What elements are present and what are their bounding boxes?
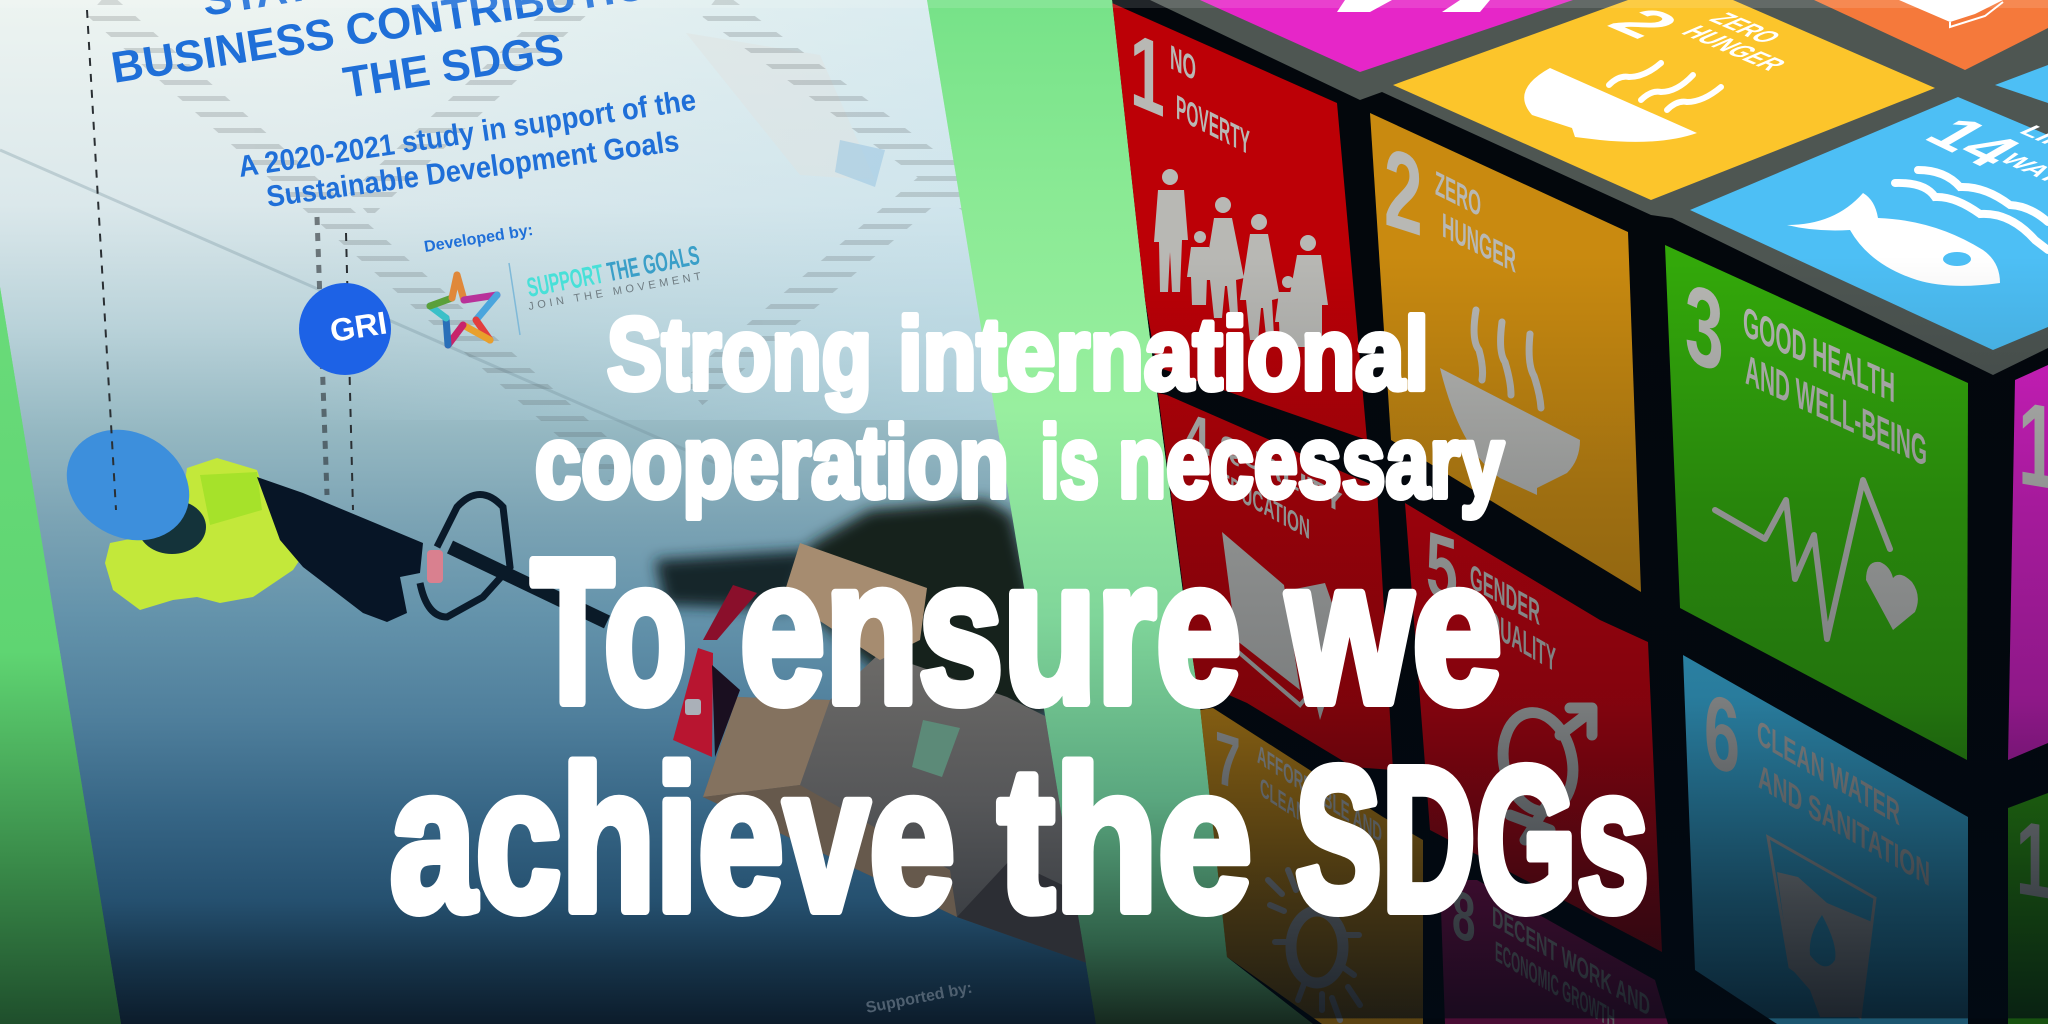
heading: strong international cooperation: cooperation [535,405,1009,519]
illustration: red bag [673,585,757,757]
tile: 1 no poverty: NO [1170,37,1196,89]
tile: 3 good health [1665,245,1968,760]
illustration: pallet jack [420,494,607,622]
tile: 4 quality education: QUALITY [1220,427,1343,520]
tile: 4 quality education: 4 [1184,400,1210,480]
tile: 2 zero hunger side [1370,113,1641,592]
tile: magenta right [2008,365,2048,760]
tile: 6 clean water: CLEAN WATER [1757,712,1900,833]
tile: top yellow zero hunger: HUNGER [1674,22,1794,74]
tile: 6 clean water [1683,655,1968,1024]
logo: support the goals: SUPPORT THE GOALS [524,240,702,303]
tile: 3 good health: 3 [1685,259,1724,397]
heading: to ensure we achieve the SDGs: we [1286,517,1502,746]
dark shadow above boxes [655,500,1050,720]
icon: sun [1268,870,1360,1020]
tile: 4 quality education [1158,393,1393,770]
tile: 2 zero hunger side: 2 [1384,123,1423,261]
heading: to ensure we achieve the SDGs: ensure [740,517,1241,746]
tile: top yellow zero hunger [1393,0,1935,200]
tile: 7 affordable clean energy: AFFORDABLE AND [1257,739,1382,850]
logo: GRI [299,283,391,375]
logo: multicolour star [430,275,497,345]
tile: top orange [1814,0,2048,70]
cover title: THE SDGS [340,25,567,108]
tile: top yellow zero hunger: ZERO [1702,9,1789,47]
cover subtitle: A 2020-2021 study in support of the [236,84,698,184]
tile: 2 zero hunger side: HUNGER [1442,205,1516,281]
tile: top blue life below water: 14 [1910,108,2037,176]
illustration: cardboard boxes [703,543,1087,963]
icon: gender symbol [1494,706,1592,840]
heading: strong international cooperation: international [898,297,1429,411]
tile: 4 quality education: EDUCATION [1220,466,1310,546]
heading: strong international cooperation: necessary [1118,405,1504,519]
tile: 6 clean water: AND SANITATION [1758,756,1930,894]
heading: to ensure we achieve the SDGs [390,517,1649,954]
tile: 1 no poverty: 1 [1130,9,1165,140]
logo: GRI: GRI [327,304,389,349]
tile: green right lower [2008,793,2048,1024]
tile: 7 affordable clean energy [1200,708,1423,1024]
tile: small blue corner [1995,65,2048,103]
tile: top yellow zero hunger: 2 [1591,1,1697,46]
logo: support the goals: JOIN THE MOVEMENT [527,271,702,313]
faint top band [0,0,2048,8]
heading: to ensure we achieve the SDGs: achieve [390,725,955,954]
decorative artefact bands [98,4,1024,470]
tile: 2 zero hunger side: ZERO [1435,163,1481,225]
tile: 7 affordable clean energy: CLEAN ENERGY [1260,772,1365,870]
heading: to ensure we achieve the SDGs: To [531,517,687,746]
icon: steaming bowl [1440,310,1580,495]
tile: 5 gender equality: 5 [1426,512,1458,624]
tile: 1 no poverty: POVERTY [1176,87,1250,163]
icon: heartbeat [1715,480,1918,639]
supported by label: Supported by: [865,980,974,1017]
heading: strong international cooperation: is [1040,405,1099,519]
tile: 1 no poverty [1112,3,1367,440]
tile: top blue life below water [1690,97,2048,350]
heading: to ensure we achieve the SDGs: the [998,725,1252,954]
icon: water glass [1768,837,1875,1017]
tile: 7 affordable clean energy: 7 [1215,716,1241,807]
cube shading gradient [1146,296,2048,1024]
heading: strong international cooperation: Strong [607,297,872,411]
heading: to ensure we achieve the SDGs: SDGs [1295,725,1649,954]
tile: 6 clean water: 6 [1704,670,1740,798]
cover subtitle [240,92,696,206]
tile: 5 gender equality: EQUALITY [1478,596,1556,680]
tile: 8 decent work [1440,876,1668,1024]
icon: open book [1222,532,1332,720]
background: green left strip [0,280,130,1024]
logo: support the goals [509,240,702,335]
tile: 5 gender equality [1405,503,1662,952]
illustration: worker [66,430,443,622]
cube of SDG tiles [1100,0,2048,1024]
heading: strong international cooperation [535,297,1504,519]
tile: top magenta [1200,0,1573,72]
tile: 8 decent work: 8 [1452,876,1475,959]
cover subtitle: Sustainable Development Goals [264,125,681,214]
tile: 5 gender equality: GENDER [1470,556,1540,633]
developed by label: Developed by: [423,222,534,256]
panel: report cover [0,0,1096,1024]
icon: family figures [1154,169,1328,347]
tile: 3 good health: GOOD HEALTH [1743,298,1895,412]
decorative dashed lines [87,10,353,510]
